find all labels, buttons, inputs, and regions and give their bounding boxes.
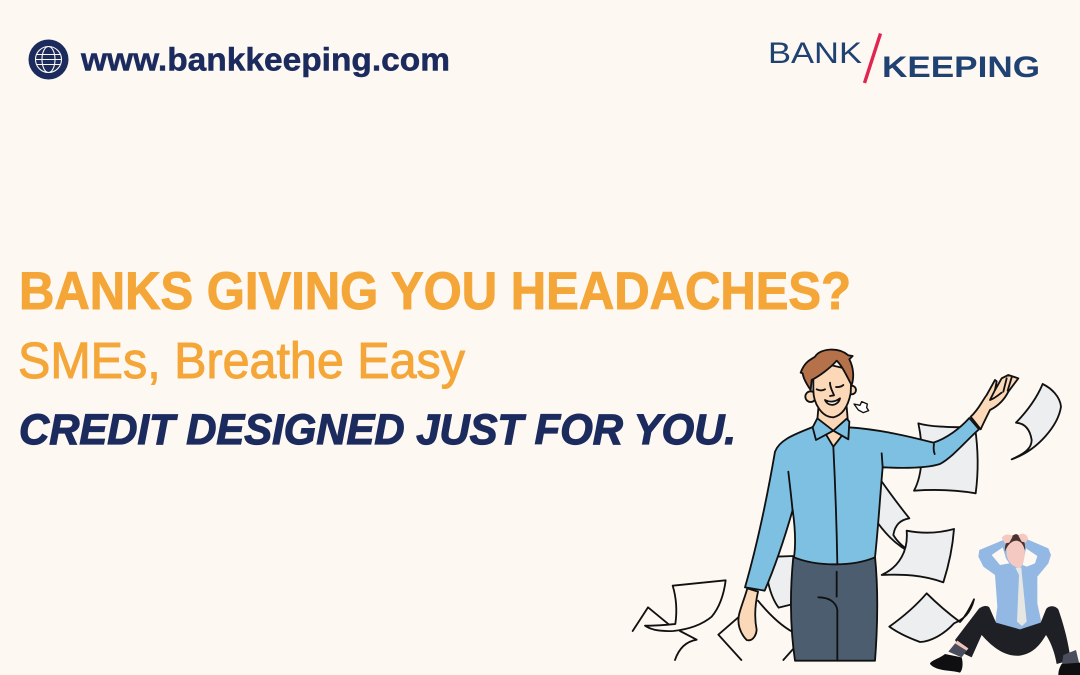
illustration: relieved man	[738, 350, 1018, 661]
website url: www.bankkeeping.com	[80, 42, 450, 78]
left sock and shoe	[948, 641, 968, 657]
paper behind left	[768, 556, 794, 608]
head	[801, 350, 869, 447]
illustration: flying papers	[768, 384, 1061, 642]
head	[1006, 536, 1025, 568]
paper behind arm	[914, 423, 978, 493]
paper right centre	[882, 529, 954, 582]
shirt and arms	[978, 539, 1051, 629]
illustration: outline papers bottom left	[633, 580, 794, 660]
paper top right	[1012, 384, 1061, 459]
hair and hands	[1005, 534, 1025, 552]
body	[738, 418, 979, 661]
trousers	[955, 606, 1071, 664]
right sock and shoe	[1062, 650, 1079, 666]
logo: Bank Keeping	[768, 34, 1040, 84]
paper lower right	[889, 593, 974, 642]
paper middle	[873, 480, 914, 554]
illustration: stressed man sitting	[930, 534, 1080, 675]
tie	[1015, 568, 1027, 626]
raised hand	[971, 375, 1018, 429]
subheading: SMEs breathe easy: SMEs, Breathe Easy	[18, 332, 465, 389]
logo: Bank Keeping: KEEPING	[882, 51, 1040, 84]
logo: Bank Keeping: BANK	[768, 37, 862, 70]
icon: globe	[28, 40, 68, 80]
tagline: credit designed just for you: CREDIT DESIGNED JUST FOR YOU.	[19, 406, 736, 454]
heading: banks giving you headaches: BANKS GIVING YOU HEADACHES?	[19, 262, 851, 321]
